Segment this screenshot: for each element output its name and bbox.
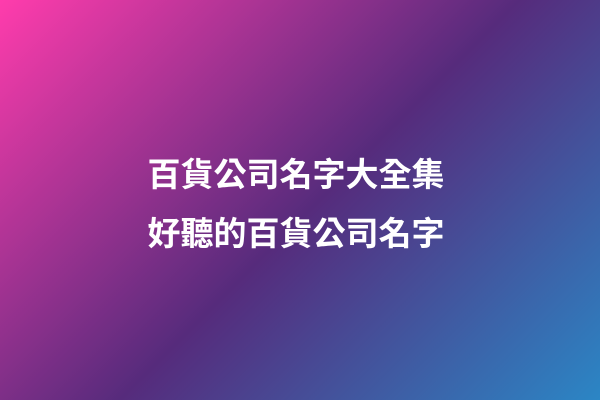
title line 2: 好聽的百貨公司名字 xyxy=(148,215,444,252)
title line 1: 百貨公司名字大全集 xyxy=(148,156,444,193)
